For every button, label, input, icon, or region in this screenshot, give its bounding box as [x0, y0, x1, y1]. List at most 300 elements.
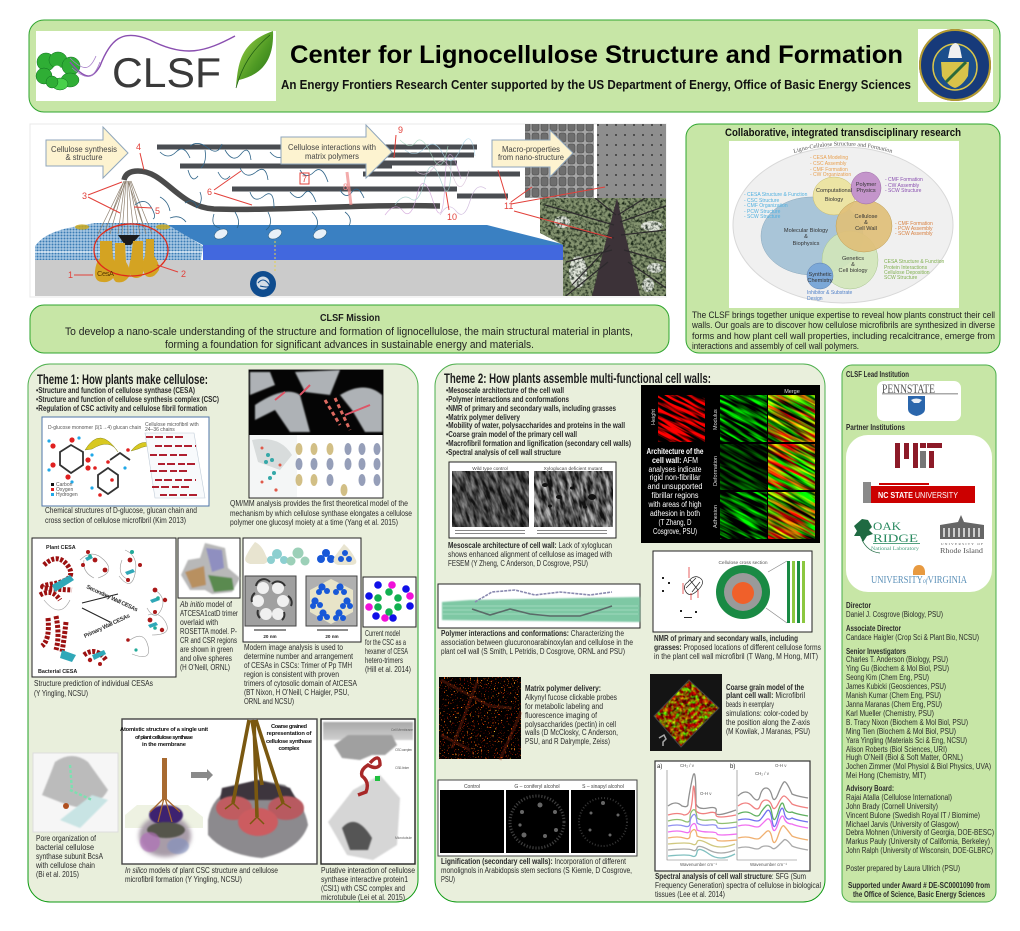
caption: image analysis: Modern image analysis is used to — [244, 643, 343, 652]
venn diagram: Biophysics — [793, 241, 820, 247]
theme 2 bullets: •Polymer interactions and conformations — [446, 395, 569, 404]
figure: FESEM images: Wild type control — [472, 466, 508, 472]
caption: fluorescence imaging: walls (D McClosky, C Anderson, — [524, 728, 618, 737]
caption: coarse grain: (M Kowilak, J Maranas, PSU) — [726, 727, 810, 736]
venn diagram: - CW Assembly — [885, 183, 920, 189]
venn diagram: SCW Structure — [884, 275, 918, 281]
personnel: senior investigators: B. Tracy Nixon (Biochem & Mol Biol, PSU) — [846, 718, 968, 727]
venn diagram: Biology — [825, 197, 843, 203]
chart: SFG spectra: CH₂ / ν — [680, 763, 695, 768]
logo: Penn State — [877, 381, 961, 421]
mission text: forming a foundation for significant advances in sustainable energy and materials. — [165, 339, 534, 351]
award acknowledgement: Supported under Award # DE-SC0001090 from — [848, 881, 990, 890]
cellulose microfibril — [124, 171, 440, 209]
caption: ab initio: overlaid with — [180, 618, 218, 627]
caption: BcsA — [35, 834, 104, 879]
caption: in silico — [125, 866, 278, 884]
caption: CSI1: synthase interactive protein1 — [321, 875, 408, 884]
chart: SFG spectra — [655, 761, 810, 871]
venn diagram: Genetics — [842, 256, 864, 262]
venn diagram: - CESA Structure & Function — [744, 192, 808, 198]
caption: polymer interaction: association between glucuronoarabinoxylan and cellulose in the — [441, 638, 633, 647]
caption: image analysis: ORNL and NCSU) — [244, 697, 294, 706]
caption: BcsA: bacterial cellulose — [36, 843, 94, 852]
caption: fluorescence imaging: PSU, and R Dalrymple, Zeiss) — [525, 737, 610, 746]
red annotations: 5 — [155, 206, 160, 216]
logo: Rhode Island: UNIVERSITY OF — [941, 542, 983, 546]
personnel: senior investigators — [846, 647, 991, 780]
logo: Rhode Island: Rhode Island — [940, 546, 983, 555]
logo: Virginia: UNIVERSITYofVIRGINIA — [871, 575, 968, 586]
figure: AFM architecture: Deformation — [713, 456, 719, 486]
collaborative description: interactions and assembly of cell wall polymers. — [692, 340, 859, 351]
caption: BcsA: Pore organization of — [36, 834, 97, 843]
personnel: advisory board: Rajai Atalla (Cellulose International) — [846, 793, 952, 802]
venn diagram: Inhibitor & Substrate — [807, 290, 853, 296]
theme 2 bullets: •Mesoscale architecture of the cell wall — [446, 386, 564, 395]
red annotations: 11 — [504, 201, 513, 211]
caption: lignification: PSU) — [441, 875, 455, 884]
figure: FESEM images — [448, 462, 616, 538]
theme 2 bullets: •NMR of primary and secondary walls, including grasses — [446, 404, 616, 413]
figure: CSC image analysis: 20 nm — [263, 634, 277, 639]
caption: fluorescence imaging: for metabolic labeling and — [525, 702, 603, 711]
caption: lignification — [441, 857, 632, 884]
arrow: macro-properties: from nano-structure — [498, 152, 564, 162]
caption: fluorescence imaging: fluorescence imaging of — [525, 711, 598, 720]
figure: AFM architecture: Adhesion — [713, 505, 719, 528]
caption: image analysis: (BT Nixon, H O’Neill, C Haigler, PSU, — [244, 688, 349, 697]
figure: glucose structures: Oxygen — [56, 487, 73, 493]
mission heading: CLSF Mission — [320, 312, 380, 324]
caption: ab initio: Ab initio model of — [179, 600, 233, 609]
mission text — [65, 326, 633, 351]
venn diagram: Cellulose — [854, 214, 878, 220]
caption: SFG spectra: tissues (Lee et al. 2014) — [655, 890, 725, 899]
matrix polymers — [135, 143, 364, 230]
caption: CSI1 — [321, 866, 415, 902]
personnel: director: Daniel J. Cosgrove (Biology, PSU) — [846, 610, 943, 619]
personnel: senior investigators: Alison Roberts (Biol Sciences, URI) — [846, 745, 947, 754]
caption: hexamer: (Hill et al. 2014) — [365, 665, 411, 674]
venn diagram: & — [804, 234, 808, 240]
figure: glucose structures: Hydrogen — [56, 492, 78, 498]
personnel: director — [846, 601, 943, 619]
caption: polymer interaction: Polymer interactions and conformations: Characterizing the — [441, 629, 624, 638]
figure: AFM architecture: Merge — [784, 389, 800, 395]
caption: coarse grain: Coarse grain model of the — [726, 683, 804, 692]
partner logos — [846, 435, 992, 592]
caption: polymer interaction: plant cell wall (S Smith, L Petridis, D Cosgrove, ORNL and PSU) — [441, 647, 625, 656]
arrow: macro-properties — [492, 130, 573, 177]
caption: in silico: microfibril formation (Y Yingling, NCSU) — [125, 875, 242, 884]
caption: NMR: in the plant cell wall microfibril (T Wang, M Hong, MIT) — [654, 652, 818, 661]
figure: monolignol images — [438, 780, 637, 856]
caption: fluorescence imaging — [524, 684, 618, 746]
caption: ab initio: and olive spheres — [180, 654, 232, 663]
caption: ab initio: ROSETTA model. P- — [180, 627, 237, 636]
caption: AFM: rigid non-fibrillar — [650, 473, 701, 482]
figure: glucose structures: β(1→4) glucan chain — [95, 425, 141, 431]
chart: SFG spectra: b) — [730, 764, 735, 770]
theme 2 bullets: •Matrix polymer delivery — [446, 413, 520, 422]
figure: NMR cross section: Cellulose cross section — [718, 560, 768, 566]
red annotations: 4 — [136, 142, 141, 152]
figure: BcsA pore — [33, 753, 118, 832]
caption: CESA structure: Structure prediction of individual CESAs — [34, 679, 153, 688]
panel: collaborative research — [686, 124, 1000, 354]
figure: in silico CSC models: representation of — [266, 731, 312, 737]
caption: NMR: NMR of primary and secondary walls, including — [654, 634, 798, 643]
caption: CESA structure — [34, 679, 153, 698]
caption: coarse grain — [726, 683, 810, 736]
caption: FESEM: FESEM (Y Zheng, C Anderson, D Cosgrove, PSU) — [448, 559, 588, 568]
collaborative heading: Collaborative, integrated transdisciplinary research — [725, 127, 961, 139]
caption: fluorescence imaging: Alkynyl fucose clickable probes — [525, 693, 617, 702]
personnel: senior investigators: Hugh O’Neill (Biol & Soft Matter, ORNL) — [846, 753, 963, 762]
venn diagram: Cell Wall — [855, 226, 877, 232]
caption: NMR — [654, 634, 821, 661]
caption: AFM — [646, 447, 704, 536]
logo: CLSF: CLSF — [112, 49, 221, 96]
venn diagram: Design — [807, 296, 823, 302]
figure: CSI1 interaction — [321, 719, 415, 864]
main illustration: cellulose from synthesis to macro-properties — [30, 124, 666, 297]
caption: coarse grain: the position along the Z-axis — [726, 718, 810, 727]
figure: AFM architecture: Modulus — [713, 409, 719, 430]
CesA complex: CesA — [97, 269, 114, 278]
caption: hexamer: hetero-trimers — [365, 656, 403, 665]
logo: MIT — [895, 443, 942, 468]
logo: NC State: NC STATE UNIVERSITY — [878, 491, 959, 500]
panel: theme 2 — [434, 364, 826, 902]
caption: image analysis: determine number and arrangement — [244, 652, 354, 661]
theme 1 bullets: •Structure and function of cellulose synthase (CESA) — [36, 386, 195, 395]
figure: glucose structures — [42, 417, 209, 506]
venn diagram: - PCW Structure — [744, 209, 781, 215]
personnel: advisory board — [846, 784, 994, 855]
personnel: advisory board: Michael Jarvis (University of Glasgow) — [846, 820, 959, 829]
personnel: senior investigators: Ying Gu (Biochem & Mol Biol, PSU) — [846, 664, 949, 673]
caption: polymer interaction — [441, 629, 633, 656]
personnel: senior investigators: Yara Yingling (Materials Sci & Eng, NCSU) — [846, 736, 967, 745]
personnel: advisory board: Advisory Board: — [846, 784, 894, 793]
caption: AFM: Cosgrove, PSU) — [653, 527, 697, 536]
venn diagram: - SCW Assembly — [895, 231, 933, 237]
figure: FESEM images: Xyloglucan deficient mutant — [544, 466, 603, 472]
poster credit: Poster prepared by Laura Ullrich (PSU) — [846, 864, 960, 873]
caption: hexamer — [365, 629, 411, 674]
icon: nucleus circle — [250, 241, 276, 297]
venn diagram: Chemistry — [807, 278, 833, 284]
personnel: associate director: Associate Director — [846, 624, 901, 633]
figure: in silico CSC models: in the membrane — [142, 742, 187, 748]
caption: AFM: cell wall: AFM — [652, 456, 698, 465]
personnel: senior investigators: James Kubicki (Geosciences, PSU) — [846, 682, 946, 691]
personnel: senior investigators: Seong Kim (Chem Eng, PSU) — [846, 673, 929, 682]
personnel: associate director: Candace Haigler (Crop Sci & Plant Bio, NCSU) — [846, 633, 979, 642]
venn diagram: - CMF Formation — [810, 167, 848, 173]
figure: monolignol images: Control — [464, 784, 480, 790]
red annotations: 6 — [207, 187, 212, 197]
personnel: advisory board: John Ralph (University of Wisconsin, DOE-GLBRC) — [846, 846, 993, 855]
figure: CSI1 interaction: CSC complex — [395, 748, 412, 752]
caption: ab initio: (H O’Neill, ORNL) — [180, 663, 230, 672]
logo: Oak Ridge: OAK — [873, 519, 901, 533]
theme 1 heading: Theme 1: How plants make cellulose: — [37, 371, 208, 387]
fibril bundles — [157, 147, 520, 196]
venn diagram: - CW Organization — [810, 172, 851, 178]
personnel: senior investigators: Charles T. Anderson (Biology, PSU) — [846, 655, 948, 664]
award acknowledgement — [848, 881, 990, 899]
caption: NMR: grasses: Proposed locations of different cellulose forms — [654, 643, 821, 652]
caption: image analysis — [244, 643, 358, 706]
caption: in silico: In silico models of plant CSC structure and cellulose — [125, 866, 278, 875]
figure: glucose structures: D-glucose monomer — [48, 425, 93, 431]
caption: lignification: monolignols in Arabidopsis stem sections (S Kiemle, D Cosgrove, — [441, 866, 632, 875]
personnel: advisory board: Vincent Bulone (Swedish Royal IT / Biomime) — [846, 811, 980, 820]
partner institutions heading: Partner Institutions — [846, 423, 906, 432]
personnel: senior investigators: Ming Tien (Biochem & Mol Biol, PSU) — [846, 727, 956, 736]
caption: QM/MM — [230, 499, 412, 527]
logo: NC State — [863, 482, 975, 503]
personnel: associate director — [846, 624, 979, 642]
personnel: senior investigators: Karl Mueller (Chemistry, PSU) — [846, 709, 934, 718]
logo: Rhode Island — [940, 515, 984, 555]
figure: monolignol images: G – coniferyl alcohol — [514, 784, 560, 790]
caption: hexamer: for the CSC as a — [365, 638, 406, 647]
caption: hexamer: hexamer of CESA — [365, 647, 408, 656]
venn diagram: - CESA Modeling — [810, 155, 848, 161]
arrow: macro-properties: Macro-properties — [502, 144, 560, 154]
caption: BcsA: with cellulose chain — [35, 861, 95, 870]
figure: coarse grain simulation — [650, 674, 722, 751]
arrow: matrix interactions — [281, 125, 392, 178]
subtitle: An Energy Frontiers Research Center supported by the US Department of Energy, Office of Basic Energy Sciences — [281, 78, 911, 92]
figure: in silico CSC models: Atomistic structure of a single unit — [120, 727, 208, 733]
theme 2 bullets: •Macrofibril formation and lignification (secondary cell walls) — [446, 439, 631, 448]
figure: AFM architecture: Height — [651, 409, 657, 425]
mission text: To develop a nano-scale understanding of the structure and formation of lignocellulose, the main structural material in plants, — [65, 326, 633, 338]
photo: cell wall surface — [525, 124, 666, 198]
venn diagram: - PCW Assembly — [895, 226, 933, 232]
panel: theme 1 — [28, 364, 418, 902]
venn diagram: & — [864, 220, 868, 226]
theme 2 bullets — [446, 386, 631, 457]
venn diagram: - CMF Organization — [744, 203, 788, 209]
figure: CESA structure predictions: Primary Wall CESAs — [83, 613, 131, 640]
caption: AFM: (T Zhang, D — [658, 518, 692, 527]
venn diagram: - SCW Structure — [744, 214, 781, 220]
personnel: advisory board: John Brady (Cornell University) — [846, 802, 938, 811]
caption: BcsA: synthase subunit BcsA — [36, 852, 104, 861]
chart: SFG spectra: a) — [657, 764, 662, 770]
icon: DOE seal — [918, 29, 993, 102]
panel: institutions and people — [842, 365, 996, 902]
caption: ab initio — [179, 600, 238, 672]
chart: SFG spectra: O-H ν — [775, 763, 787, 768]
figure: CSC image analysis: 20 nm — [325, 634, 339, 639]
figure: NMR cross section — [653, 551, 812, 632]
red annotations: 9 — [398, 125, 403, 135]
chart: SFG spectra: Wavenumber cm⁻¹ — [750, 862, 787, 867]
theme 2 bullets: •Coarse grain model of the primary cell wall — [446, 430, 577, 439]
CesA complex — [94, 181, 168, 282]
logo: Oak Ridge: National Laboratory — [871, 546, 919, 552]
figure: QM/MM model — [249, 370, 383, 498]
caption: ab initio: CR and CSR regions — [180, 636, 237, 645]
logo: Virginia — [871, 565, 968, 586]
caption: glucose: Chemical structures of D-glucose, glucan chain and — [45, 506, 197, 515]
venn diagram: & — [851, 262, 855, 268]
figure: CESA structure predictions — [32, 538, 176, 677]
caption: QM/MM: polymer one glucosyl moiety at a time (Yang et al. 2015) — [230, 518, 398, 527]
vesicles — [213, 227, 328, 241]
award acknowledgement: the Office of Science, Basic Energy Sciences — [853, 890, 986, 899]
figure: glucose structures: Carbon — [56, 482, 73, 488]
caption: AFM: adhesion in both — [650, 509, 700, 518]
theme 1 bullets: •Structure and function of cellulose synthesis complex (CSC) — [36, 395, 219, 404]
collaborative description: forms and how plant cell wall properties, including recalcitrance, emerge from — [692, 330, 995, 341]
caption: SFG spectra: Spectral analysis of cell wall structure: SFG (Sum — [655, 872, 806, 881]
figure: CESA structure predictions: Plant CESA — [46, 545, 76, 551]
venn diagram: Protein Interactions — [884, 265, 928, 271]
caption: BcsA: (Bi et al. 2015) — [36, 870, 79, 879]
theme 2 bullets: •Spectral analysis of cell wall structure — [446, 448, 561, 457]
caption: FESEM — [448, 541, 612, 568]
caption: FESEM: Mesoscale architecture of cell wall: Lack of xyloglucan — [448, 541, 612, 550]
logo: Oak Ridge: RIDGE — [873, 531, 918, 545]
lead institution heading: CLSF Lead Institution — [846, 370, 909, 379]
caption: coarse grain: plant cell wall: Microfibril — [726, 691, 805, 700]
caption: CSI1: Putative interaction of cellulose — [321, 866, 415, 875]
venn diagram: Cellulose Deposition — [884, 270, 930, 276]
red annotations: 7 — [302, 174, 307, 184]
caption: CESA structure: (Y Yingling, NCSU) — [34, 689, 88, 698]
caption: AFM: analyses indicate — [648, 465, 702, 474]
venn diagram: Computational — [816, 188, 852, 194]
caption: ab initio: are shown in green — [180, 645, 233, 654]
caption: ab initio: ATCESA1catD trimer — [180, 609, 238, 618]
caption: image analysis: region is consistent with proven — [244, 670, 339, 679]
venn diagram: - CMF Formation — [895, 221, 933, 227]
figure: CESA structure predictions: Secondary Wall CESAs — [85, 584, 138, 613]
arrow: cellulose synthesis — [46, 127, 128, 178]
figure: CSI1 interaction: Cell Membrane — [391, 728, 413, 732]
personnel: senior investigators: Janna Maranas (Chem Eng, PSU) — [846, 700, 942, 709]
figure: CSI1 interaction: CSI1 linker — [395, 766, 410, 770]
caption: AFM: and unsupported — [648, 482, 702, 491]
photo: tree — [540, 198, 666, 296]
caption: image analysis: trimers of cytosolic domain of AtCESA — [244, 679, 358, 688]
arrow: cellulose synthesis: & structure — [66, 152, 103, 162]
caption: glucose — [45, 506, 197, 525]
figure: in silico CSC models: Coarse grained — [271, 724, 307, 730]
personnel: advisory board: Debra Mohnen (University of Georgia, DOE-BESC) — [846, 828, 994, 837]
figure: polymer interaction simulation — [438, 584, 640, 628]
arrow: matrix interactions: matrix polymers — [305, 151, 359, 161]
title: Center for Lignocellulose Structure and Formation — [290, 41, 903, 69]
colored polymer specks — [385, 139, 486, 215]
figure: glucose structures: Cellulose microfibril with — [145, 422, 199, 428]
red annotations: 10 — [447, 212, 457, 222]
chart: SFG spectra: Wavenumber cm⁻¹ — [680, 862, 717, 867]
caption: QM/MM: QM/MM analysis provides the first theoretical model of the — [230, 499, 408, 508]
caption: image analysis: of CESAs in CSCs: Trimer of Pp TMH — [244, 661, 352, 670]
caption: SFG spectra — [655, 872, 821, 899]
theme 2 heading: Theme 2: How plants assemble multi-functional cell walls: — [444, 370, 711, 386]
venn diagram: Polymer — [856, 182, 876, 188]
figure: glucose structures: 24–36 chains — [145, 427, 175, 433]
panel: mission — [30, 305, 669, 353]
header panel — [29, 20, 1000, 112]
personnel: senior investigators: Senior Investigators — [846, 647, 907, 656]
venn diagram: - CMF Formation — [885, 177, 923, 183]
arrow: matrix interactions: Cellulose interactions with — [288, 142, 376, 152]
theme 1 bullets: •Regulation of CSC activity and cellulose fibril formation — [36, 404, 207, 413]
figure: fluorescence imaging — [439, 677, 521, 760]
caption: CSI1: (CSI1) with CSC complex and — [321, 884, 405, 893]
caption: hexamer: Current model — [365, 629, 400, 638]
personnel: director: Director — [846, 601, 871, 610]
personnel: advisory board: Markus Pauly (University of California, Berkeley) — [846, 837, 990, 846]
cell layers — [35, 223, 566, 296]
venn diagram: CESA Structure & Function — [884, 259, 945, 265]
chart: SFG spectra: CH₂ / ν — [755, 771, 770, 776]
figure: in silico CSC models — [120, 719, 317, 864]
venn diagram: Synthetic — [808, 272, 832, 278]
caption: FESEM: shows enhanced alignment of cellulose as imaged with — [448, 550, 612, 559]
figure: in silico CSC models: of plant cellulose synthase — [135, 735, 194, 741]
logo: CLSF — [36, 31, 276, 101]
chart: SFG spectra: O-H ν — [700, 791, 712, 796]
venn diagram: Physics — [856, 188, 876, 194]
personnel: senior investigators: Jochen Zimmer (Mol Physiol & Biol Physics, UVA) — [846, 762, 991, 771]
caption: AFM: Architecture of the — [646, 447, 704, 456]
venn diagram: - CSC Structure — [744, 198, 780, 204]
red annotations: 1 — [68, 270, 73, 280]
red annotations — [68, 125, 612, 280]
caption: CSI1: microtubule (Lei et al. 2015) — [321, 893, 405, 902]
logo: Penn State: PENNSTATE — [882, 381, 935, 396]
caption: AFM: fibrillar regions — [652, 491, 698, 500]
figure: hexamer model — [363, 577, 416, 627]
caption: SFG spectra: Frequency Generation) spectra of cellulose in biological — [655, 881, 821, 890]
caption: coarse grain: beads in exemplary — [726, 700, 774, 709]
caption: fluorescence imaging: polysaccharides (pectin) in cell — [525, 720, 616, 729]
figure: CESA structure predictions: Bacterial CESA — [38, 669, 77, 675]
logo: Oak Ridge — [854, 519, 920, 553]
figure: CSC image analysis — [243, 538, 361, 642]
caption: fluorescence imaging: Matrix polymer delivery: — [525, 684, 601, 693]
theme 2 bullets: •Mobility of water, polysaccharides and proteins in the wall — [446, 421, 625, 430]
personnel: senior investigators: Manish Kumar (Chem Eng, PSU) — [846, 691, 941, 700]
personnel: senior investigators: Mei Hong (Chemistry, MIT) — [846, 771, 926, 780]
figure: AFM architecture — [641, 385, 820, 543]
venn diagram: Molecular Biology — [784, 228, 828, 234]
venn diagram: Ligno-Cellulose Structure and Formation — [793, 142, 892, 153]
figure: in silico CSC models: complex — [278, 746, 300, 752]
red annotations: 3 — [82, 191, 87, 201]
venn diagram: Cell biology — [839, 268, 868, 274]
collaborative description — [691, 309, 995, 351]
figure: CSI1 interaction: Microtubule — [395, 836, 412, 840]
figure: ab initio trimer — [178, 538, 240, 598]
caption: QM/MM: mechanism by which cellulose synthase elongates a cellulose — [230, 509, 412, 518]
venn diagram: - SCW Structure — [885, 188, 922, 194]
caption: lignification: Lignification (secondary cell walls): Incorporation of different — [441, 857, 627, 866]
figure: in silico CSC models: cellulose synthase — [266, 739, 313, 745]
